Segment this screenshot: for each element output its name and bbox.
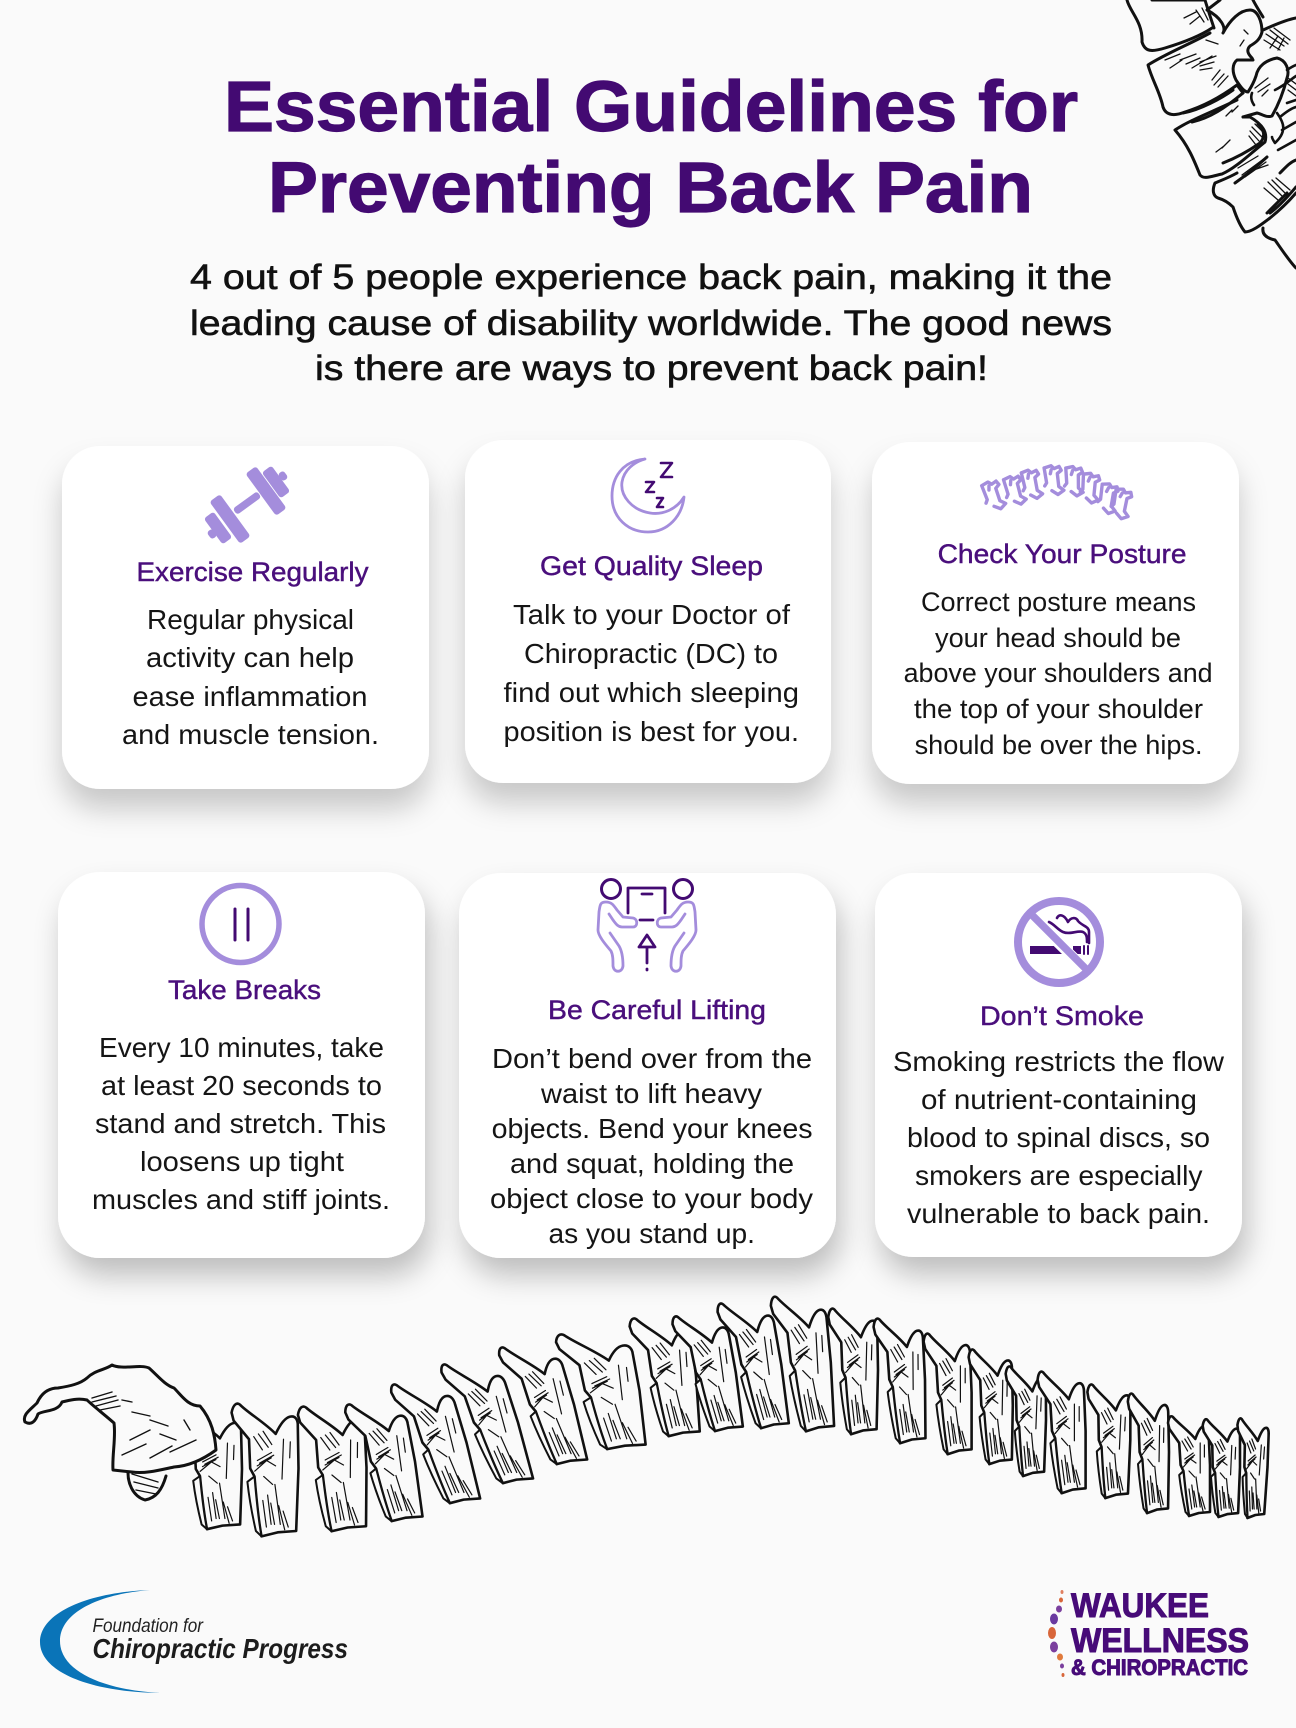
- body text: ease inflammation: [132, 681, 368, 712]
- vertebrae: [174, 1297, 1271, 1536]
- body text: muscles and stiff joints.: [92, 1184, 390, 1215]
- body text: [504, 599, 799, 747]
- logo text: & CHIROPRACTIC: [1071, 1655, 1248, 1680]
- body text: waist to lift heavy: [540, 1078, 762, 1109]
- body text: Correct posture means: [921, 587, 1196, 617]
- body text: Talk to your Doctor of: [513, 599, 790, 630]
- body text: objects. Bend your knees: [492, 1113, 813, 1144]
- body text: [122, 604, 379, 750]
- subtitle text block: [190, 258, 1112, 388]
- panel: check your posture: [872, 442, 1239, 784]
- icon: moon with z letters: [612, 459, 684, 532]
- subtitle text block: leading cause of disability worldwide. The good news: [190, 304, 1112, 343]
- body text: smokers are especially: [915, 1160, 1202, 1191]
- icon: two people lifting a box: [598, 880, 696, 971]
- heading: Be Careful Lifting: [548, 995, 766, 1025]
- body text: and squat, holding the: [510, 1148, 794, 1179]
- body text: [893, 1046, 1225, 1229]
- logo: waukee wellness and chiropractic: [1048, 1587, 1249, 1680]
- body text: of nutrient-containing: [921, 1084, 1197, 1115]
- logo dotted spine: [1048, 1590, 1064, 1677]
- body text: [490, 1043, 813, 1249]
- logo: foundation for chiropractic progress: [40, 1590, 348, 1693]
- body text: Smoking restricts the flow: [893, 1046, 1225, 1077]
- body text: position is best for you.: [504, 716, 799, 747]
- heading: Exercise Regularly: [136, 557, 369, 587]
- skull base: [24, 1365, 216, 1500]
- body text: at least 20 seconds to: [101, 1070, 382, 1101]
- panel: be careful lifting: [459, 873, 836, 1258]
- body text: as you stand up.: [548, 1218, 755, 1249]
- body text: stand and stretch. This: [95, 1108, 386, 1139]
- icon: no smoking: [1018, 901, 1100, 983]
- body text: blood to spinal discs, so: [907, 1122, 1210, 1153]
- subtitle text block: 4 out of 5 people experience back pain, making it the: [190, 258, 1112, 297]
- illustration: spine corner top right: [1127, 0, 1296, 268]
- heading: Check Your Posture: [938, 539, 1187, 569]
- body text: Chiropractic (DC) to: [524, 638, 778, 669]
- body text: and muscle tension.: [122, 719, 379, 750]
- body text: Regular physical: [147, 604, 354, 635]
- body text: the top of your shoulder: [914, 694, 1203, 724]
- illustration: horizontal spine: [24, 1297, 1271, 1536]
- body text: Every 10 minutes, take: [99, 1032, 384, 1063]
- icon: dumbbell: [204, 466, 290, 544]
- heading: Don’t Smoke: [980, 1001, 1144, 1031]
- panel: exercise regularly: [62, 446, 429, 789]
- body text: [904, 587, 1213, 760]
- heading: Get Quality Sleep: [540, 551, 763, 581]
- logo crescent: [40, 1590, 160, 1693]
- body text: find out which sleeping: [504, 677, 799, 708]
- title: Preventing Back Pain: [268, 149, 1033, 228]
- panel: don't smoke: [875, 873, 1242, 1257]
- title: [224, 68, 1078, 228]
- body text: your head should be: [935, 623, 1181, 653]
- title: Essential Guidelines for: [224, 68, 1078, 147]
- body text: activity can help: [146, 642, 354, 673]
- panel: get quality sleep: [465, 440, 831, 783]
- logo small text: Foundation for: [92, 1616, 204, 1637]
- body text: vulnerable to back pain.: [907, 1198, 1210, 1229]
- heading: Take Breaks: [168, 975, 321, 1005]
- body text: [92, 1032, 390, 1215]
- subtitle text block: is there are ways to prevent back pain!: [315, 349, 988, 388]
- logo text: WAUKEE: [1071, 1587, 1209, 1625]
- body text: should be over the hips.: [915, 730, 1203, 760]
- body text: above your shoulders and: [904, 658, 1213, 688]
- logo text: [1071, 1587, 1249, 1680]
- logo large text: Chiropractic Progress: [92, 1633, 348, 1664]
- panel: take breaks: [58, 872, 425, 1258]
- body text: loosens up tight: [140, 1146, 344, 1177]
- logo text: WELLNESS: [1071, 1622, 1249, 1660]
- icon: pause circle: [202, 886, 279, 962]
- body text: Don’t bend over from the: [492, 1043, 812, 1074]
- body text: object close to your body: [490, 1183, 813, 1214]
- icon: spine arch: [981, 465, 1135, 520]
